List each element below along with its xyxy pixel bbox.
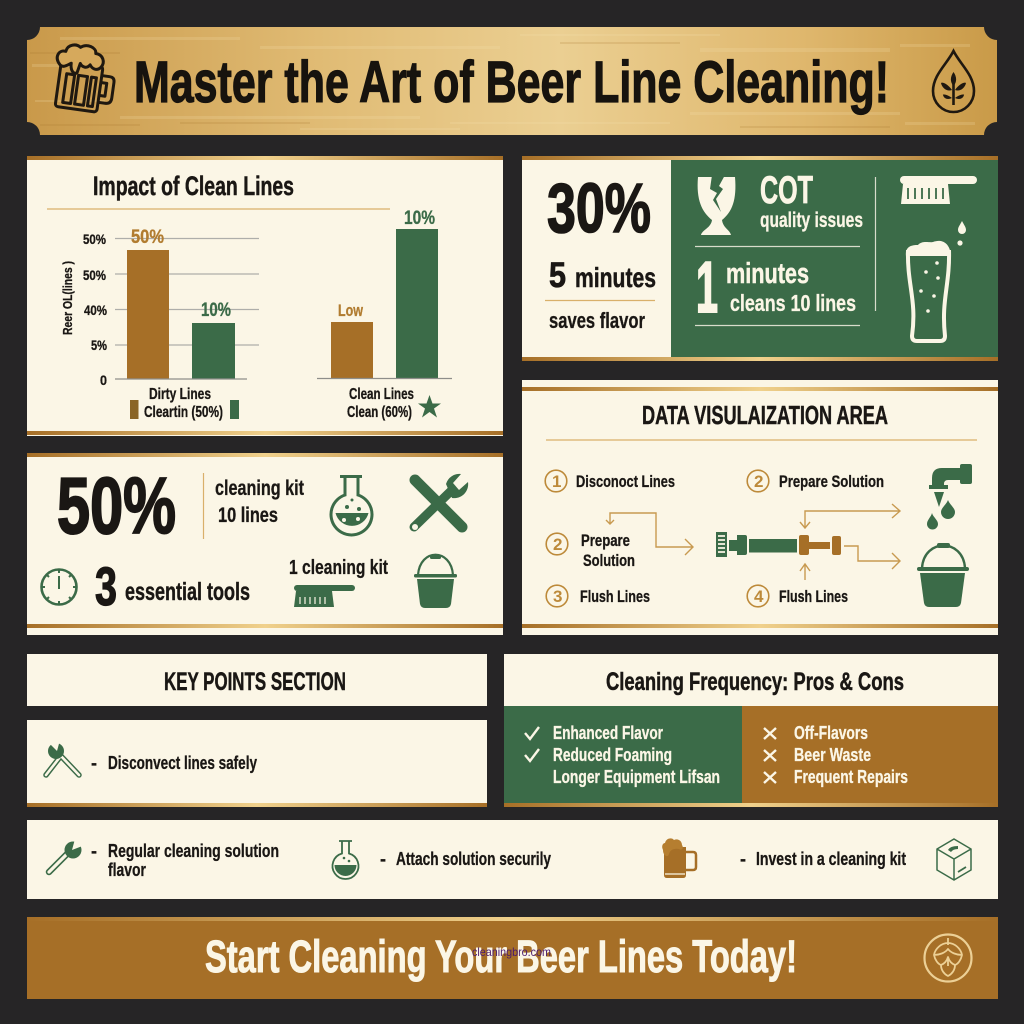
panel: key stats on green: quality issues	[760, 209, 863, 232]
icon: hop	[924, 934, 972, 982]
bar chart: clean lines	[317, 208, 452, 421]
text: 1 minutes cleans 10 lines: 1	[696, 248, 718, 328]
text: 1 cleaning kit: 1 cleaning kit	[289, 557, 388, 579]
step labels: 1	[552, 472, 561, 491]
panel: key points row: Attach solution securily	[396, 849, 551, 869]
panel: key points row: Invest in a cleaning kit	[756, 849, 906, 869]
bar chart: dirty lines: Reer OL(lines )	[60, 261, 75, 335]
icon: beer mug	[662, 838, 696, 878]
step labels: Prepare Solution	[779, 472, 884, 491]
icon: flask	[331, 476, 372, 535]
text: invest: -	[740, 849, 746, 869]
text: attach solution: -	[380, 849, 386, 869]
bar chart: clean lines: Clean Lines	[349, 386, 414, 403]
panel: cleaning kit stats: essential tools	[125, 578, 250, 606]
step labels: 2	[754, 472, 763, 491]
bar chart: dirty lines: 50%	[83, 267, 106, 283]
icon: water drop with leaves	[933, 51, 974, 112]
cons list: Frequent Repairs	[794, 767, 908, 787]
step labels: 4	[754, 587, 764, 606]
icon: box	[937, 839, 971, 880]
panel: key points row	[27, 820, 998, 899]
bar chart: dirty lines: 5%	[91, 337, 107, 353]
icon: beer line pipe	[716, 532, 841, 557]
stat: 3 essential tools: 3	[95, 557, 117, 617]
cons list: Off-Flavors	[794, 723, 868, 743]
step labels: Solution	[583, 551, 635, 570]
panel: key point disconnect: Disconvect lines safely	[108, 753, 257, 773]
bar chart: dirty lines: 50%	[83, 231, 106, 247]
icon: beer glass with drops	[906, 221, 966, 341]
bar chart: dirty lines: 40%	[84, 302, 107, 318]
step labels: Prepare	[581, 531, 630, 550]
panel: key points heading	[27, 654, 487, 706]
bar chart: dirty lines: Dirty Lines	[149, 386, 211, 403]
bar chart: clean lines: Low	[338, 301, 364, 320]
panel: key point disconnect	[27, 720, 487, 807]
step labels: Disconoct Lines	[576, 472, 675, 491]
panel: key stats on green: minutes	[575, 262, 656, 293]
text: saves flavor: saves flavor	[549, 308, 645, 333]
icon: dripping faucet	[927, 464, 972, 530]
chart heading: Impact of Clean Lines	[93, 171, 294, 201]
diagram heading: DATA VISULAIZATION AREA	[642, 400, 888, 430]
heading: Cleaning Frequency: Pros & Cons	[606, 668, 904, 696]
bar chart: dirty lines: 0	[100, 372, 107, 388]
bar chart: dirty lines: Cleartin (50%)	[144, 404, 223, 421]
cons list	[764, 723, 908, 787]
pros list: Longer Equipment Lifsan	[553, 767, 720, 787]
bar chart: dirty lines: 50%	[131, 227, 164, 248]
icon: bucket	[917, 543, 969, 607]
panel: key stats on green: cleans 10 lines	[730, 290, 856, 316]
pros list: Reduced Foaming	[553, 745, 672, 765]
icon: crossed tools	[412, 474, 468, 530]
bar chart: dirty lines	[60, 227, 259, 421]
panel: cleaning kit stats	[27, 453, 503, 635]
step labels: 2	[553, 535, 562, 554]
panel: call to action	[27, 917, 998, 999]
icon: flask	[333, 841, 359, 879]
panel: impact of clean lines	[27, 156, 503, 436]
stat: 5 minutes: 5	[549, 256, 566, 295]
panel: key stats on green: minutes	[726, 258, 809, 290]
text: regular cleaning: -	[91, 841, 97, 861]
icon: beer mug	[50, 42, 119, 114]
arrows	[606, 504, 900, 580]
stat: 30%: 30%	[547, 169, 651, 247]
watermark url: cleaningbro.com	[472, 945, 551, 959]
bar chart: clean lines: 10%	[404, 208, 435, 229]
icon: wrench	[49, 839, 85, 872]
icon: bucket	[414, 555, 457, 608]
panel: key points row: flavor	[108, 860, 146, 880]
icon: clock	[42, 570, 76, 604]
icon: tools outline	[46, 740, 79, 775]
text: COT: COT	[760, 169, 813, 212]
panel: pros and cons	[504, 654, 998, 807]
icon: brush	[294, 585, 355, 607]
text: disconnect lines: -	[91, 753, 97, 773]
panel: key stats on green	[522, 156, 998, 361]
panel: cleaning kit stats: 10 lines	[218, 504, 278, 527]
cons list: Beer Waste	[794, 745, 871, 765]
panel: key points row: Regular cleaning solution	[108, 841, 279, 861]
text: cleaning kit 10 lines: cleaning kit	[215, 477, 304, 500]
stat: 50%: 50%	[57, 461, 176, 550]
icon: brush	[900, 176, 977, 204]
call to action text: Start Cleaning Your Beer Lines Today!	[205, 931, 797, 982]
pros list	[525, 723, 720, 787]
step labels: 3	[553, 587, 562, 606]
pros list: Enhanced Flavor	[553, 723, 663, 743]
panel: process diagram	[522, 380, 998, 635]
bar chart: dirty lines: 10%	[201, 300, 231, 321]
icon: broken glass	[698, 175, 735, 235]
step labels	[545, 470, 884, 607]
panel: key points heading: KEY POINTS SECTION	[164, 668, 346, 696]
step labels: Flush Lines	[779, 587, 848, 606]
step labels: Flush Lines	[580, 587, 650, 606]
header banner	[27, 27, 997, 135]
bar chart: clean lines: Clean (60%)	[347, 404, 412, 421]
